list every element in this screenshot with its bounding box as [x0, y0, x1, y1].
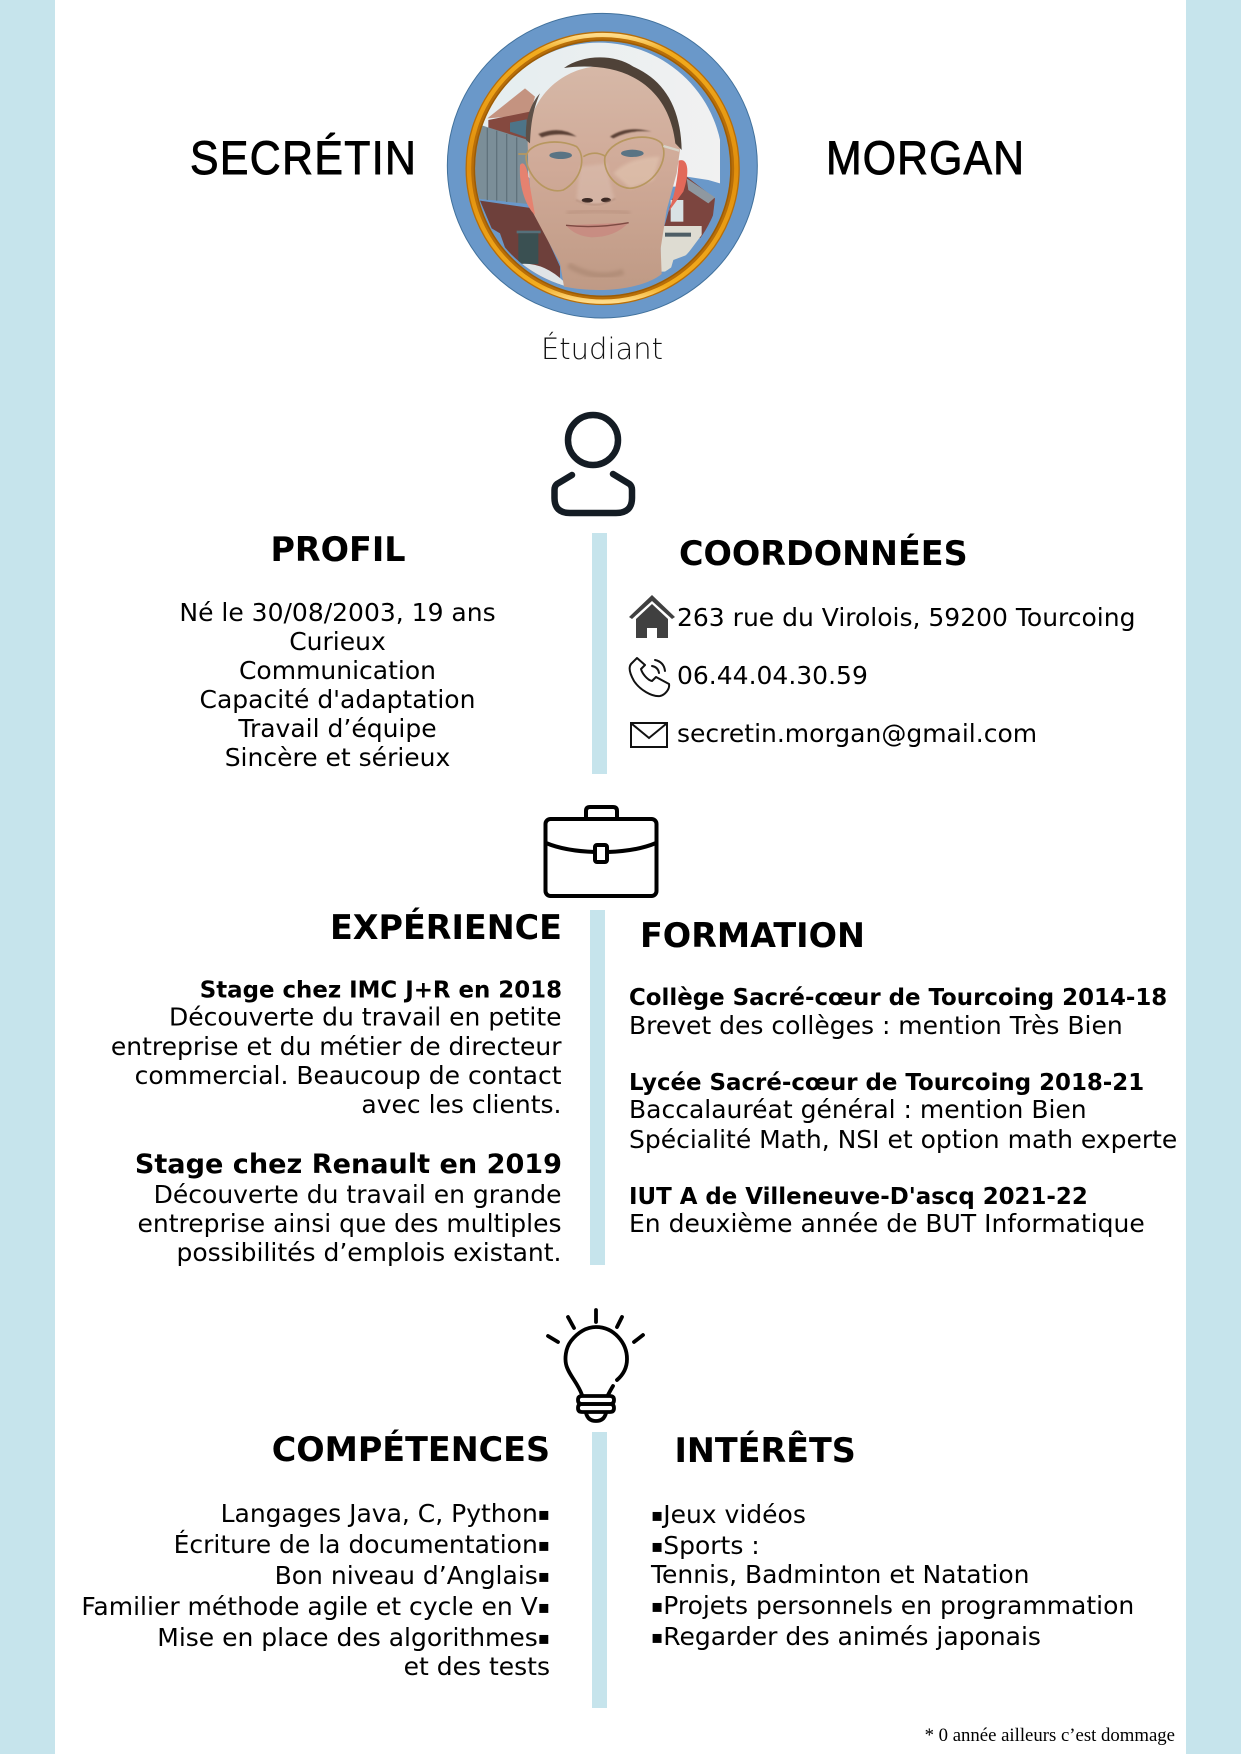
interests list: Regarder des animés japonais — [663, 1622, 1041, 1651]
glasses — [518, 137, 679, 191]
panel: competences — [81, 1429, 550, 1681]
icon: house — [629, 595, 675, 638]
interests list: ▪ — [651, 1596, 663, 1617]
lens tint — [613, 157, 660, 188]
right side band — [1186, 0, 1241, 1754]
skills list: et des tests — [404, 1652, 550, 1681]
face — [528, 66, 680, 290]
panel: coordonnees — [629, 533, 1135, 748]
formation: college: Collège Sacré-cœur de Tourcoing 2014-18 — [629, 985, 1167, 1011]
icon: briefcase — [546, 807, 656, 896]
experience: stage Renault: entreprise ainsi que des multiples — [138, 1209, 562, 1238]
heading: coordonnees: COORDONNÉES — [679, 533, 968, 573]
skills list: Écriture de la documentation — [174, 1530, 538, 1559]
formation: college — [629, 985, 1167, 1040]
name: first name: MORGAN — [826, 131, 1024, 185]
divider bar: competences / interets — [592, 1432, 607, 1708]
icon: phone — [630, 658, 669, 696]
heading: experience: EXPÉRIENCE — [330, 907, 562, 947]
divider bar: profil / coordonnees — [592, 533, 607, 774]
gold ring — [470, 36, 735, 300]
skills list: Familier méthode agile et cycle en V — [81, 1592, 538, 1621]
skills list: ▪ — [538, 1535, 550, 1556]
email: secretin.morgan@gmail.com — [677, 719, 1037, 748]
panel: formation — [629, 916, 1177, 1238]
eyebrows — [538, 130, 577, 137]
profile list: Curieux — [289, 627, 386, 656]
interests list: ▪ — [651, 1627, 663, 1648]
skills list: Langages Java, C, Python — [221, 1499, 538, 1528]
divider bar: experience / formation — [590, 910, 605, 1265]
profile list: Communication — [239, 656, 436, 685]
experience: stage Renault: Stage chez Renault en 2019 — [135, 1149, 562, 1180]
panel: interets — [650, 1430, 1134, 1651]
experience: stage IMC: Stage chez IMC J+R en 2018 — [200, 978, 562, 1004]
eyes — [549, 152, 572, 159]
interests list: Sports : — [663, 1531, 760, 1560]
heading: formation: FORMATION — [640, 916, 865, 955]
heading: interets: INTÉRÊTS — [674, 1430, 856, 1470]
panel: profil — [179, 530, 496, 772]
skills list: ▪ — [538, 1504, 550, 1525]
job title: Étudiant — [541, 332, 663, 366]
name: last name: SECRÉTIN — [190, 131, 416, 185]
skills list: Bon niveau d’Anglais — [275, 1561, 538, 1590]
icon: light bulb — [548, 1310, 643, 1421]
experience: stage Renault: Découverte du travail en grande — [154, 1180, 562, 1209]
experience: stage Renault: possibilités d’emplois existant. — [176, 1238, 562, 1267]
nose — [582, 198, 593, 203]
formation: IUT — [629, 1184, 1145, 1238]
hair — [564, 57, 682, 150]
interests list: Tennis, Badminton et Natation — [650, 1560, 1030, 1589]
experience: stage IMC: entreprise et du métier de directeur — [111, 1032, 562, 1061]
heading: competences: COMPÉTENCES — [272, 1429, 550, 1469]
icon: envelope — [631, 723, 667, 747]
portrait photo in circular frame — [447, 13, 757, 318]
experience: stage IMC: Découverte du travail en petite — [169, 1002, 562, 1032]
address: 263 rue du Virolois, 59200 Tourcoing — [677, 603, 1135, 632]
formation: lycee — [629, 1070, 1177, 1154]
formation: lycee: Spécialité Math, NSI et option math experte — [629, 1125, 1177, 1154]
formation: IUT: En deuxième année de BUT Informatique — [629, 1209, 1145, 1238]
profile list: Travail d’équipe — [237, 714, 437, 743]
experience: stage Renault — [135, 1149, 562, 1267]
skills list: Mise en place des algorithmes — [157, 1623, 538, 1652]
phone number: 06.44.04.30.59 — [677, 661, 868, 690]
skills list: ▪ — [538, 1628, 550, 1649]
interests list: Jeux vidéos — [661, 1500, 806, 1529]
soft shading — [577, 163, 615, 205]
footnote: * 0 année ailleurs c’est dommage — [925, 1725, 1175, 1746]
experience: stage IMC: commercial. Beaucoup de contact — [135, 1061, 562, 1090]
mouth — [566, 223, 629, 237]
panel: experience — [111, 907, 562, 1267]
skills list: ▪ — [538, 1566, 550, 1587]
interests list: ▪ — [651, 1536, 663, 1557]
left side band — [0, 0, 55, 1754]
profile list: Capacité d'adaptation — [200, 685, 475, 714]
formation: lycee: Baccalauréat général : mention Bien — [629, 1095, 1087, 1124]
formation: college: Brevet des collèges : mention Très Bien — [629, 1011, 1123, 1040]
interests list: ▪ — [651, 1505, 663, 1526]
ears — [520, 163, 535, 215]
profile list: Sincère et sérieux — [225, 743, 450, 772]
icon: person — [554, 415, 632, 513]
profile list — [179, 598, 496, 772]
skills list: ▪ — [538, 1597, 550, 1618]
interests list: Projets personnels en programmation — [663, 1591, 1134, 1620]
experience: stage IMC: avec les clients. — [361, 1090, 562, 1119]
formation: lycee: Lycée Sacré-cœur de Tourcoing 2018-21 — [629, 1070, 1144, 1096]
formation: IUT: IUT A de Villeneuve-D'ascq 2021-22 — [629, 1184, 1088, 1210]
interests list — [650, 1500, 1134, 1651]
profile list: Né le 30/08/2003, 19 ans — [179, 598, 496, 627]
experience: stage IMC — [111, 978, 562, 1119]
skills list — [81, 1499, 550, 1681]
heading: profil: PROFIL — [270, 530, 406, 569]
